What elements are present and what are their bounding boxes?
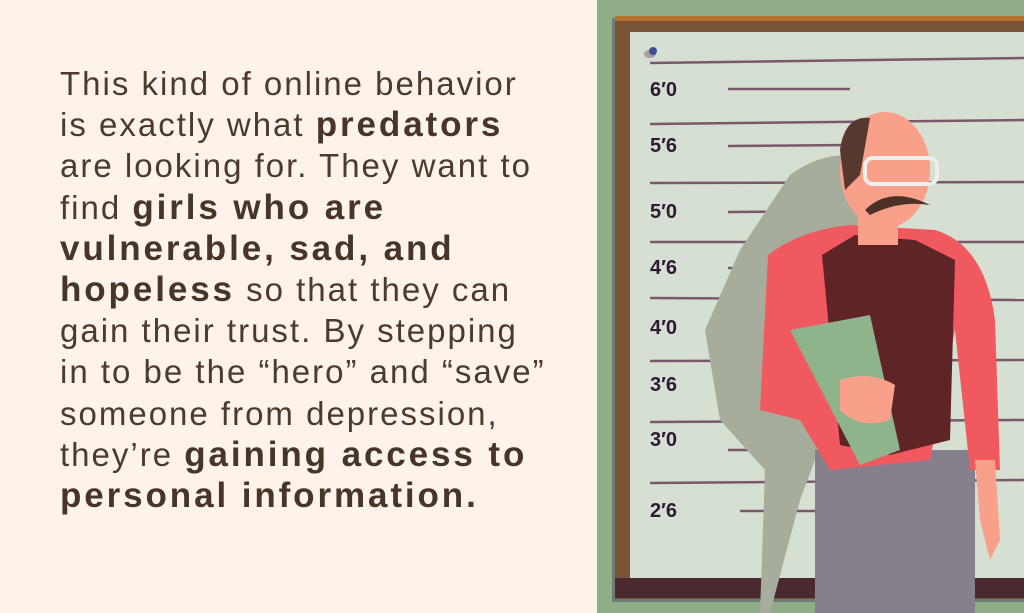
height labels: 2′6 [650,500,677,522]
pin [644,47,657,58]
height labels: 5′6 [650,135,677,157]
height lines [650,58,1024,511]
text block: someone from depression, [60,395,499,432]
height labels: 4′6 [650,257,677,279]
text block: in to be the “hero” and “save” [60,353,546,390]
text block: hopeless so that they can [60,270,511,309]
text block: find girls who are [60,188,386,227]
text block: they’re gaining access to [60,435,527,474]
illustration: lineup board with man [597,0,1024,613]
man [760,112,1000,613]
text block: gain their trust. By stepping [60,312,518,349]
shadow [705,155,900,613]
height labels: 3′0 [650,429,677,451]
height labels: 5′0 [650,201,677,223]
text block: are looking for. They want to [60,147,532,184]
height labels: 4′0 [650,317,677,339]
text block: This kind of online behavior [60,65,518,102]
text block: personal information. [60,476,479,515]
text block: vulnerable, sad, and [60,229,454,268]
height labels [650,79,677,522]
height labels: 3′6 [650,374,677,396]
text block: is exactly what predators [60,105,503,144]
height labels: 6′0 [650,79,677,101]
text block [60,65,546,515]
